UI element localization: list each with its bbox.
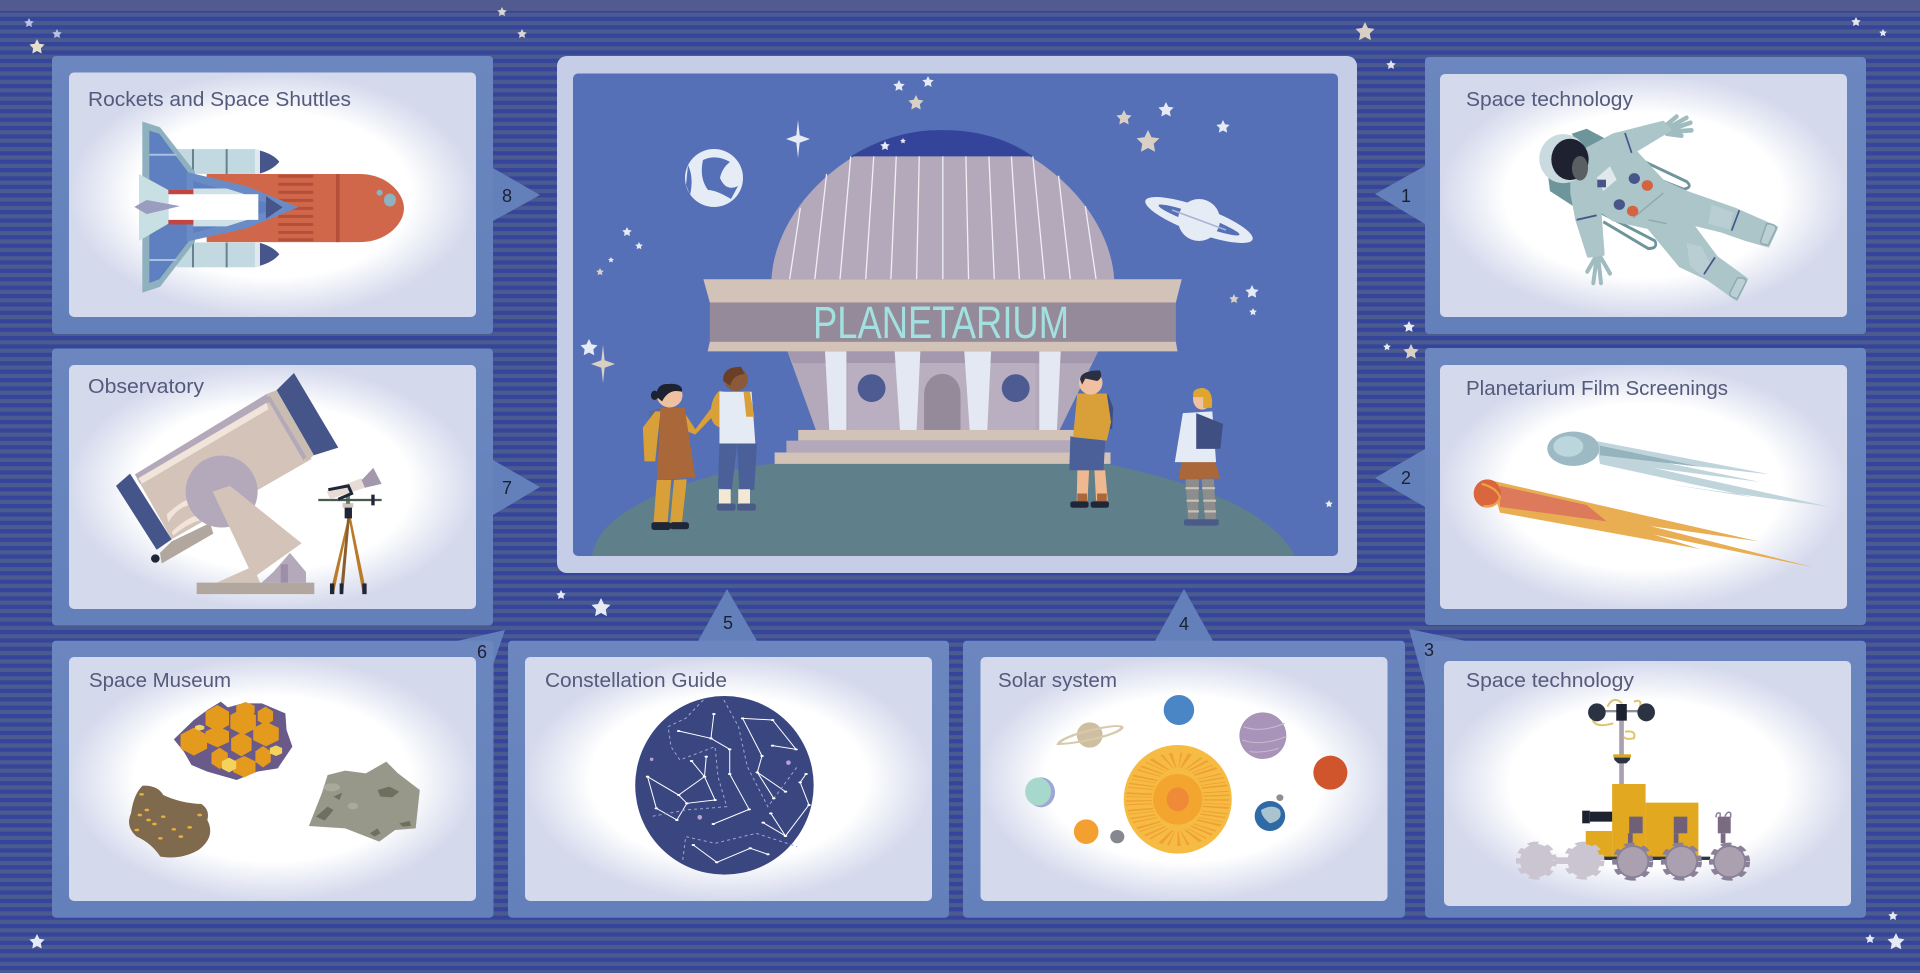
person: boy with yellow backpack <box>711 367 757 511</box>
central panel: planetarium scene <box>557 56 1357 573</box>
heading: space technology: Space technology <box>1466 669 1635 692</box>
panel 3: space technology (rover) <box>1409 629 1866 918</box>
illustration: grey comet and fire comet <box>1474 432 1830 567</box>
number 8: 8 <box>502 186 512 206</box>
number 1: 1 <box>1401 186 1411 206</box>
person: teen with yellow shirt <box>1069 370 1113 508</box>
heading: planetarium film screenings: Planetarium Film Screenings <box>1466 377 1728 400</box>
panel 2: planetarium film screenings (comets) <box>1375 348 1866 625</box>
panel 1: space technology (astronaut) <box>1375 57 1866 334</box>
icon: ringed planet <box>1141 188 1257 252</box>
panel 8: rockets and space shuttles <box>52 56 540 334</box>
heading: space museum: Space Museum <box>89 669 231 692</box>
illustration: planetary rover <box>1520 700 1746 878</box>
building sign text: PLANETARIUM <box>813 297 1069 348</box>
panel 6: space museum <box>52 630 505 918</box>
illustration: astronaut <box>1539 117 1777 299</box>
heading: rockets and space shuttles: Rockets and Space Shuttles <box>88 88 351 111</box>
illustration: space shuttle with rocket <box>134 122 404 293</box>
person: girl with dark backpack <box>1175 388 1223 526</box>
planetarium building <box>703 130 1182 464</box>
panel 4: solar system <box>963 589 1405 918</box>
panel 5: constellation guide <box>508 589 949 918</box>
icon: moon planet <box>685 149 743 207</box>
number 5: 5 <box>723 613 733 633</box>
number 3: 3 <box>1424 640 1434 660</box>
scene stars <box>580 76 1333 507</box>
illustration: sun and planets <box>1025 695 1347 854</box>
heading: observatory: Observatory <box>88 375 205 398</box>
heading: solar system: Solar system <box>998 669 1117 692</box>
dome stars <box>880 138 906 150</box>
number 2: 2 <box>1401 468 1411 488</box>
person: woman in brown dress <box>643 383 714 530</box>
ground hill <box>592 454 1295 556</box>
heading: constellation guide: Constellation Guide <box>545 669 727 692</box>
illustration: star map <box>635 696 814 875</box>
number 6: 6 <box>477 642 487 662</box>
illustration: meteorite rocks <box>129 702 420 857</box>
number 4: 4 <box>1179 614 1189 634</box>
heading: space technology: Space technology <box>1466 88 1634 111</box>
illustration: large telescope and tripod <box>116 373 382 594</box>
panel 7: observatory <box>52 348 540 626</box>
number 7: 7 <box>502 478 512 498</box>
